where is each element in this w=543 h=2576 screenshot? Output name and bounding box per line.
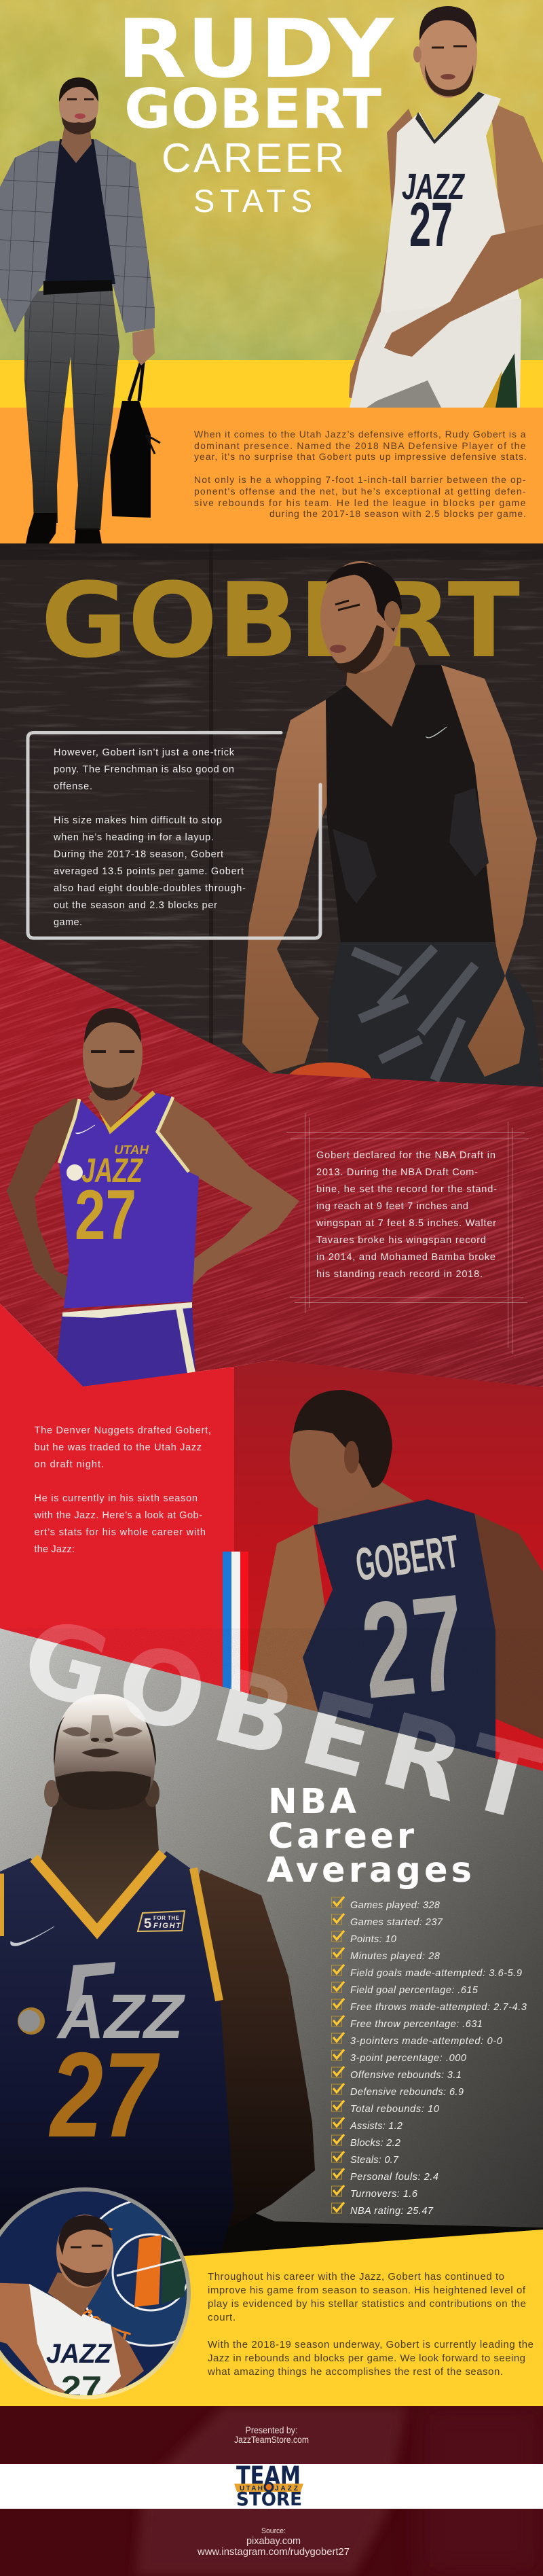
French flag stripes: [223, 1552, 248, 1701]
Team Store logo: UTAH: [240, 2485, 263, 2492]
stat: games played: [331, 1897, 440, 1911]
dark lower wedge under wall: [0, 2106, 543, 2283]
closing text: play is evidenced by his stellar statistics and contributions on the: [208, 2298, 526, 2310]
jersey number: 27: [49, 2027, 160, 2162]
stat: 3-point percentage: [331, 2050, 466, 2064]
badge: FOR THE: [153, 1915, 180, 1921]
stat: free throw percentage: [331, 2016, 483, 2030]
stat: free throws: Free throws made-attempted: 2.7-4.3: [350, 2002, 527, 2013]
decorative frame and text: NBA draft: wingspan at 7 feet 8.5 inches. Walter: [316, 1218, 496, 1229]
jersey lettering: JAZZ: [402, 166, 465, 207]
stat: offensive rebounds: [331, 2067, 462, 2081]
text: Denver Nuggets draft: [34, 1425, 211, 1555]
circular portrait of Gobert: BASKET: [83, 2309, 131, 2340]
text: one-trick pony: also had eight double-doubles through-: [54, 883, 246, 894]
circular portrait of Gobert: UTA: [109, 2228, 113, 2231]
text: one-trick pony: game.: [54, 917, 82, 928]
stat: personal fouls: Personal fouls: 2.4: [350, 2172, 438, 2183]
white logo band: [0, 2464, 543, 2509]
text: one-trick pony: when he’s heading in for a layup.: [53, 832, 214, 843]
stat: 3-pointers: [331, 2033, 502, 2047]
stat: blocks: Blocks: 2.2: [350, 2138, 400, 2149]
decorative frame and text: NBA draft: Tavares broke his wingspan record: [316, 1235, 486, 1246]
closing text: improve his game from season to season. His heightened level of: [208, 2285, 526, 2296]
panel: red right: [234, 1360, 543, 1780]
stat: defensive rebounds: [331, 2083, 464, 2098]
text: one-trick pony: out the season and 2.3 blocks per: [54, 900, 217, 911]
head: [320, 561, 402, 674]
closing text: Throughout his career with the Jazz, Gobert has continued to: [208, 2271, 504, 2283]
photo: Gobert in grey suit with bag: [0, 77, 160, 543]
circular portrait of Gobert: 27: [61, 2369, 102, 2405]
stat: NBA rating: [331, 2202, 434, 2217]
head: [282, 1390, 390, 1518]
basketball: [289, 1062, 371, 1079]
neck and hand: [61, 122, 92, 163]
text: one-trick pony: pony. The Frenchman is also good on: [54, 764, 234, 775]
badge: [138, 1911, 185, 1931]
decorative frame and text: NBA draft: his standing reach record in 2018.: [316, 1269, 483, 1280]
sources: www.instagram.com/rudygobert27: [197, 2546, 350, 2558]
title: GOBERT: [124, 77, 381, 141]
text panel outline: [28, 732, 320, 938]
stat: field goals: [331, 1965, 522, 1979]
Team Store logo: STORE: [236, 2488, 302, 2510]
text: Denver Nuggets draft: He is currently in his sixth season: [34, 1493, 198, 1504]
text: Denver Nuggets draft: The Denver Nuggets drafted Gobert,: [34, 1425, 211, 1436]
panel: grey textured wall: [0, 1628, 543, 2310]
swoosh: [11, 1927, 54, 1946]
stat: minutes played: Minutes played: 28: [350, 1951, 440, 1962]
stat checklist: [331, 1897, 527, 2217]
jacket: [0, 139, 155, 333]
intro text: ponent's offense and the net, but he’s exceptional at getting defen-: [194, 486, 526, 497]
decorative frame and text: NBA draft: in 2014, and Mohamed Bamba broke: [316, 1252, 495, 1263]
stat: points: [331, 1931, 396, 1945]
neck: [48, 2272, 102, 2316]
title: CAREER: [162, 135, 344, 181]
belt: [43, 280, 113, 295]
closing text: [207, 2271, 533, 2378]
panel: yellow closing section: [0, 2230, 543, 2406]
stat: NBA rating: NBA rating: 25.47: [350, 2206, 434, 2217]
stat: blocks: [331, 2134, 400, 2149]
arms: [349, 109, 413, 398]
circular portrait of Gobert: JAZZ: [46, 2339, 113, 2369]
jersey: [59, 1092, 199, 1308]
jersey number: 27: [355, 1566, 472, 1728]
text: Denver Nuggets draft: ert’s stats for his whole career with: [34, 1527, 206, 1538]
stat: points: Points: 10: [350, 1934, 396, 1945]
jersey lettering: [67, 1143, 149, 1255]
photo: Gobert from behind in France jersey: [250, 1390, 543, 1766]
jersey lettering: JAZZ: [81, 1151, 144, 1189]
text: one-trick pony: offense.: [54, 781, 92, 792]
stat: offensive rebounds: Offensive rebounds: 3.1: [350, 2070, 462, 2081]
stat: defensive rebounds: Defensive rebounds: 6.9: [350, 2087, 464, 2098]
head: [44, 1694, 160, 1810]
stat: total rebounds: [331, 2100, 439, 2115]
jersey lettering: UTAH: [114, 1143, 149, 1157]
photo: Gobert in black tank against wall: [242, 561, 543, 1098]
stat: steals: [331, 2151, 399, 2166]
stat: games started: [331, 1914, 443, 1928]
legs: [24, 285, 119, 530]
title: RUDY: [117, 3, 395, 96]
photo: Gobert in white Jazz uniform: 27: [409, 190, 453, 260]
jersey logo: [18, 1962, 186, 2052]
text: Denver Nuggets draft: with the Jazz. Here’s a look at Gob-: [34, 1510, 202, 1521]
heading: NBA Career Averages: Averages: [267, 1850, 472, 1891]
decorative frame and text: NBA draft: Gobert declared for the NBA Draft in: [316, 1150, 495, 1161]
photo: Gobert looking up in navy Jazz jersey: [0, 1694, 315, 2310]
intro text: dominant presence. Named the 2018 NBA Defensive Player of the: [194, 440, 526, 451]
big gold GOBERT heading: GOBERT: [41, 560, 520, 681]
bag: [110, 357, 160, 518]
title: STATS: [193, 183, 312, 219]
jersey: [380, 92, 520, 316]
text: one-trick pony: [53, 747, 246, 928]
head: [56, 2215, 113, 2288]
shirt: [45, 139, 115, 284]
closing text: With the 2018-19 season underway, Gobert is currently leading the: [208, 2339, 533, 2350]
stat: personal fouls: [331, 2168, 438, 2183]
stat: turnovers: [331, 2185, 418, 2200]
shorts: [350, 299, 521, 408]
closing text: Jazz in rebounds and blocks per game. We look forward to seeing: [208, 2353, 525, 2364]
presented by: JazzTeamStore.com: [234, 2435, 309, 2445]
badge: FIGHT: [153, 1922, 181, 1930]
stat: field goals: Field goals made-attempted: 3.6-5.9: [350, 1968, 522, 1979]
stat: steals: Steals: 0.7: [350, 2155, 399, 2166]
decorative frame and text: NBA draft: bine, he set the record for the stand-: [316, 1184, 497, 1195]
forearm and hand: [384, 224, 543, 357]
neck: [41, 1793, 160, 1936]
Team Store logo: JAZZ: [275, 2485, 298, 2492]
presented by: Presented by:: [246, 2425, 297, 2435]
team logo disc: [77, 2199, 224, 2346]
stat: 3-pointers: 3-pointers made-attempted: 0-0: [350, 2036, 502, 2047]
circular portrait of Gobert: [0, 2187, 191, 2399]
sources: pixabay.com: [246, 2535, 301, 2547]
jersey logo: AZZ: [56, 1982, 186, 2052]
text: one-trick pony: However, Gobert isn’t just a one-trick: [54, 747, 235, 758]
stat: assists: [331, 2117, 402, 2132]
orange intro panel: [0, 408, 543, 543]
panel: bright red left: [0, 1304, 234, 1698]
panel: dark brick wall background: [0, 543, 543, 1101]
jersey: [0, 1851, 234, 2310]
decorative frame and text: NBA draft: [286, 1113, 529, 1354]
closing text: what amazing things he accomplishes the rest of the season.: [207, 2366, 503, 2378]
intro text: [194, 429, 527, 519]
sources: Source:: [261, 2527, 286, 2535]
shorts: [327, 941, 543, 1087]
shoulders: [250, 1525, 339, 1766]
stat: field goal percentage: [331, 1982, 479, 1996]
ghost GOBERT watermark over wall: GOBERT: [11, 1597, 543, 1845]
closing text: court.: [208, 2312, 236, 2323]
yellow band: [0, 360, 543, 408]
head: [59, 77, 98, 135]
panel: dark red textured section: [0, 939, 543, 1387]
intro text: during the 2017-18 season with 2.5 blocks per game.: [269, 508, 526, 519]
intro text: year, it's no surprise that Gobert puts up impressive defensive stats.: [194, 451, 527, 462]
stat: free throws: [331, 1999, 527, 2013]
intro text: sive rebounds for his team. He led the league in blocks per game: [194, 497, 526, 508]
arms: [7, 1098, 88, 1298]
badge: 5: [144, 1916, 151, 1931]
stat: minutes played: [331, 1948, 440, 1962]
heading: NBA Career Averages: NBA: [268, 1782, 357, 1822]
shorts: [57, 1304, 195, 1387]
neck: [318, 1481, 414, 1524]
text: one-trick pony: During the 2017-18 season, Gobert: [54, 849, 223, 860]
ghost GOBERT watermark over red: GOBERT: [11, 1597, 543, 1845]
stat: turnovers: Turnovers: 1.6: [350, 2189, 418, 2200]
intro text: When it comes to the Utah Jazz’s defensive efforts, Rudy Gobert is a: [194, 429, 526, 440]
Team Store logo: [234, 2461, 303, 2510]
text: Denver Nuggets draft: on draft night.: [34, 1459, 104, 1470]
photo: Gobert in white Jazz uniform: [349, 6, 543, 408]
Team Store logo: TEAM: [236, 2461, 301, 2490]
decorative frame and text: NBA draft: 2013. During the NBA Draft Com-: [316, 1167, 478, 1178]
jersey: [29, 2284, 121, 2399]
stat: free throw percentage: Free throw percentage: .631: [350, 2019, 483, 2030]
neck: [88, 1087, 143, 1128]
photo: Gobert in purple Jazz uniform: [7, 1008, 299, 1387]
swoosh: [426, 727, 447, 738]
arms: [242, 700, 327, 1073]
intro text: Not only is he a whopping 7-foot 1-inch-tall barrier between the op-: [194, 474, 526, 485]
sources: [197, 2527, 350, 2558]
text: Denver Nuggets draft: the Jazz:: [34, 1544, 75, 1555]
stat: games started: Games started: 237: [350, 1917, 443, 1928]
text: one-trick pony: averaged 13.5 points per game. Gobert: [54, 866, 244, 877]
footer: maroon background with faded jersey: [0, 2406, 543, 2576]
stat: field goal percentage: Field goal percentage: .615: [350, 1985, 479, 1996]
stat: games played: Games played: 328: [350, 1900, 440, 1911]
stat: total rebounds: Total rebounds: 10: [350, 2104, 439, 2115]
tank top: [326, 665, 495, 942]
decorative frame and text: NBA draft: ing reach at 9 feet 7 inches and: [316, 1201, 468, 1212]
shoes: [26, 513, 57, 543]
heading: NBA Career Averages: [267, 1782, 472, 1891]
arm: [163, 1870, 315, 2255]
head: [83, 1008, 143, 1101]
stat: assists: Assists: 1.2: [350, 2121, 402, 2132]
text: one-trick pony: His size makes him difficult to stop: [54, 815, 222, 826]
heading: NBA Career Averages: Career: [268, 1817, 414, 1857]
neck: [346, 641, 415, 727]
swoosh: [76, 1125, 95, 1134]
arm and shoulders: [0, 2283, 81, 2398]
stat: 3-point percentage: 3-point percentage: .000: [350, 2053, 466, 2064]
hero background: mottled yellow-green wall: [0, 0, 543, 360]
presented by: [234, 2425, 309, 2445]
head: [413, 6, 477, 98]
title: [117, 3, 395, 219]
text: Denver Nuggets draft: but he was traded to the Utah Jazz: [34, 1442, 202, 1453]
jersey lettering: 27: [75, 1176, 136, 1255]
jersey: [303, 1499, 495, 1766]
